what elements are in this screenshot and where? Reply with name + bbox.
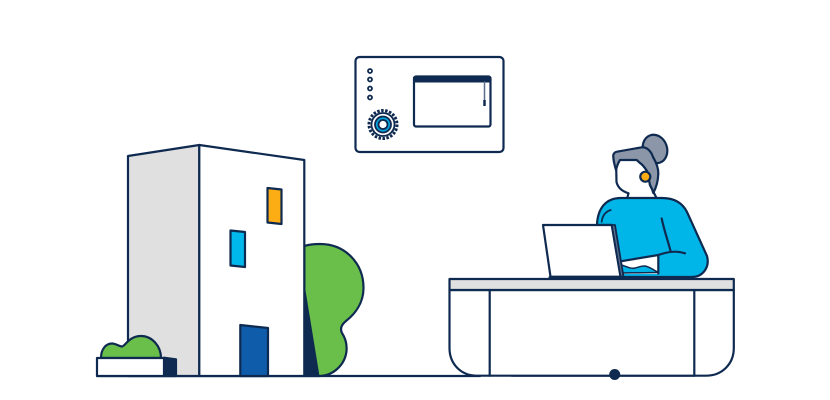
panel frame [356, 57, 504, 152]
control panel [356, 57, 504, 152]
earpiece [640, 172, 650, 182]
laptop hinge [612, 225, 624, 277]
desk [450, 279, 734, 380]
bush planter [97, 336, 176, 376]
title bar [414, 76, 490, 82]
desk legs [490, 290, 694, 376]
forearm [622, 265, 658, 273]
hair [613, 147, 658, 193]
blue window [230, 230, 245, 267]
door [240, 325, 268, 376]
laptop screen [543, 225, 620, 277]
orange window [268, 188, 282, 224]
desk foot dot [609, 369, 620, 380]
neck and face [616, 158, 657, 199]
tree [304, 244, 364, 376]
building side wall [128, 145, 199, 376]
hair bun [639, 131, 671, 167]
ground line [97, 375, 694, 377]
desk top thick edge under laptop and arm [550, 276, 692, 279]
arm crease lines [618, 218, 685, 274]
planter shadow [164, 358, 176, 376]
desk body [450, 290, 734, 376]
screen window [414, 76, 490, 126]
bush [101, 336, 161, 358]
scrollbar [484, 82, 486, 100]
planter box [97, 358, 164, 376]
shoulder detail [602, 210, 611, 222]
building [128, 145, 304, 376]
building front wall [199, 145, 304, 376]
person [543, 131, 708, 278]
body [597, 198, 708, 277]
gear dial [369, 110, 397, 138]
status dots [368, 69, 372, 100]
tree shadow [304, 283, 320, 376]
desk top [450, 279, 734, 290]
hand [618, 255, 658, 274]
